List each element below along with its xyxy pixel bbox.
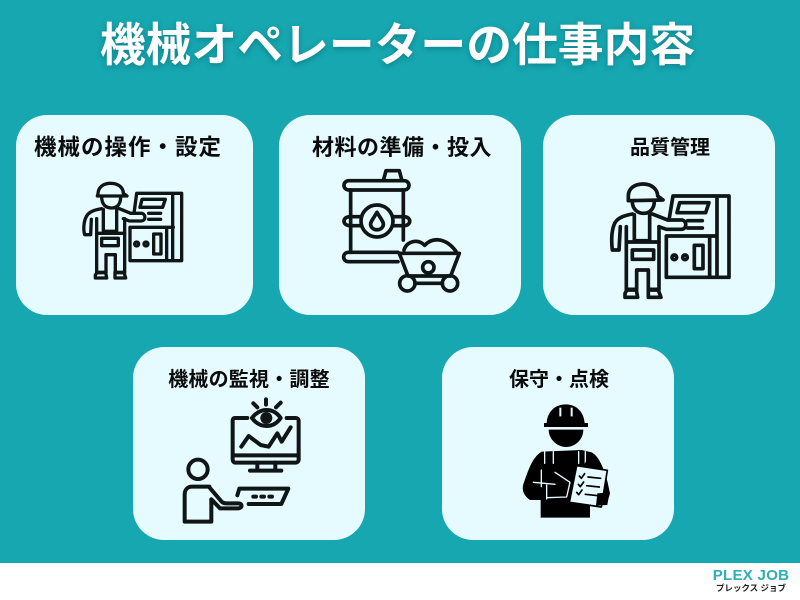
heading: material preparation: 材料の準備・投入 [312, 135, 492, 160]
icon: operator at machine (small) [84, 183, 182, 278]
heading: maintenance: 保守・点検 [509, 369, 609, 391]
logo: PLEX JOB [713, 567, 789, 593]
panel: machine operation [16, 115, 253, 315]
icon: inspector with clipboard [523, 404, 610, 518]
heading: quality control: 品質管理 [630, 137, 710, 159]
heading: machine operation: 機械の操作・設定 [34, 135, 222, 160]
icon: operator at machine (large) [612, 184, 729, 297]
heading: monitoring: 機械の監視・調整 [168, 369, 330, 391]
title: 機械オペレーターの仕事内容 [100, 20, 695, 71]
panel: material preparation [279, 115, 521, 315]
icon: person monitoring screen [185, 399, 299, 522]
panel: maintenance [442, 347, 674, 540]
panel: quality control [543, 115, 775, 315]
icon: barrel and mine cart [344, 171, 459, 291]
logo wordmark: PLEX JOB [713, 567, 789, 584]
panel: monitoring [133, 347, 365, 540]
logo katakana: プレックス ジョブ [716, 583, 786, 593]
